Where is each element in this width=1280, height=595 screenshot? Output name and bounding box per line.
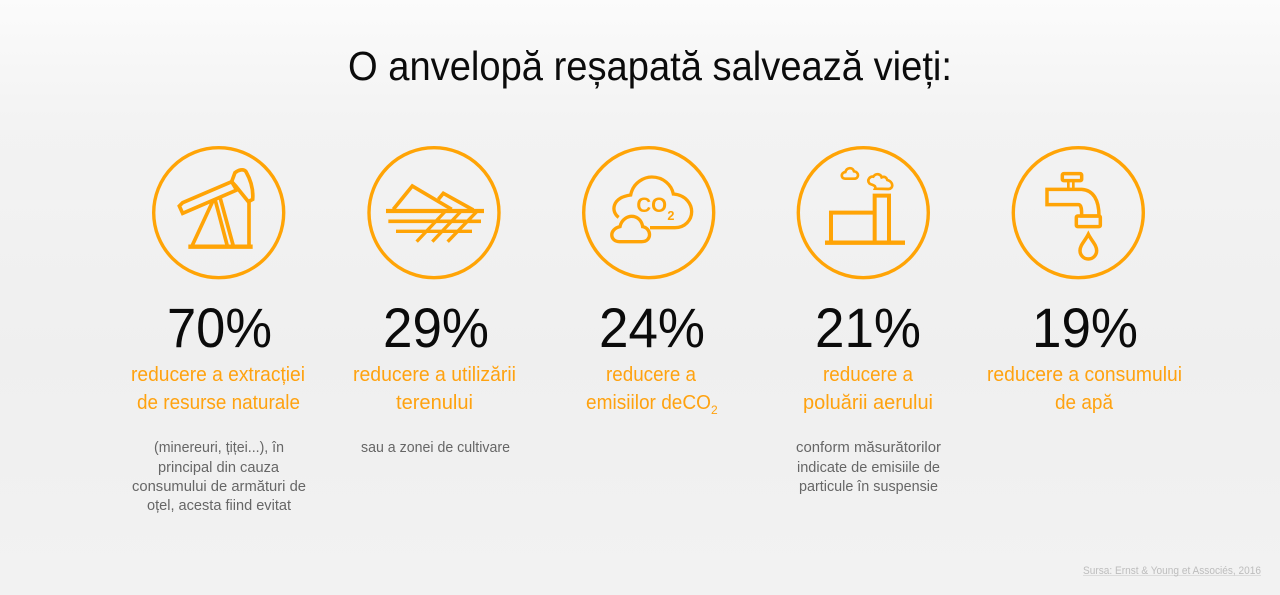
title: O anvelopă reșapată salvează vieți: xyxy=(348,43,952,89)
icon: oil pump xyxy=(154,148,284,278)
note: natural resources: principal din cauza xyxy=(158,459,280,476)
note: natural resources: (minereuri, țiței...), în xyxy=(154,439,284,456)
note: air pollution: particule în suspensie xyxy=(799,478,938,495)
note: air pollution: conform măsurătorilor xyxy=(796,439,941,456)
label: CO2 emissions: reducere a xyxy=(606,364,697,386)
note: air pollution xyxy=(796,439,941,495)
note: natural resources xyxy=(132,439,306,514)
icon: CO2 clouds xyxy=(584,148,714,278)
panel: CO2 emissions xyxy=(584,148,718,417)
note: land use: sau a zonei de cultivare xyxy=(361,439,510,456)
label: water use: reducere a consumului xyxy=(987,364,1182,386)
panel: water use xyxy=(987,148,1182,414)
label: air pollution: poluării aerului xyxy=(803,392,933,414)
label: natural resources: reducere a extracției xyxy=(131,364,305,386)
percentage: 29%: 29% xyxy=(383,296,489,359)
label: land use: terenului xyxy=(396,392,473,414)
percentage: 19%: 19% xyxy=(1032,296,1138,359)
percentage: 24%: 24% xyxy=(599,296,705,359)
icon: factory xyxy=(798,148,928,278)
note: air pollution: indicate de emisiile de xyxy=(797,459,940,476)
label: water use: de apă xyxy=(1055,392,1114,414)
note: natural resources: consumului de armături de xyxy=(132,478,306,495)
percentage: 21%: 21% xyxy=(815,296,921,359)
icon: CO2 clouds: CO xyxy=(636,193,667,217)
label: air pollution xyxy=(803,364,933,414)
label: land use: reducere a utilizării xyxy=(353,364,516,386)
label: land use xyxy=(353,364,516,414)
note: natural resources: oțel, acesta fiind evitat xyxy=(147,497,292,514)
icon: CO2 clouds: 2 xyxy=(667,209,674,223)
label: water use xyxy=(987,364,1182,414)
source note: Sursa: Ernst & Young et Associés, 2016 xyxy=(1083,565,1261,577)
percentage: 70%: 70% xyxy=(167,296,272,359)
label: CO2 emissions xyxy=(586,364,718,417)
icon: land xyxy=(369,148,499,278)
label: CO2 emissions: emisiilor deCO xyxy=(586,392,711,414)
label: CO2 emissions: 2 xyxy=(711,403,718,417)
label: natural resources xyxy=(131,364,305,414)
label: natural resources: de resurse naturale xyxy=(137,392,300,414)
label: air pollution: reducere a xyxy=(823,364,914,386)
icon: water tap xyxy=(1013,148,1143,278)
panel: air pollution xyxy=(796,148,941,495)
panel: natural resources xyxy=(131,148,306,514)
panel: land use xyxy=(353,148,516,456)
